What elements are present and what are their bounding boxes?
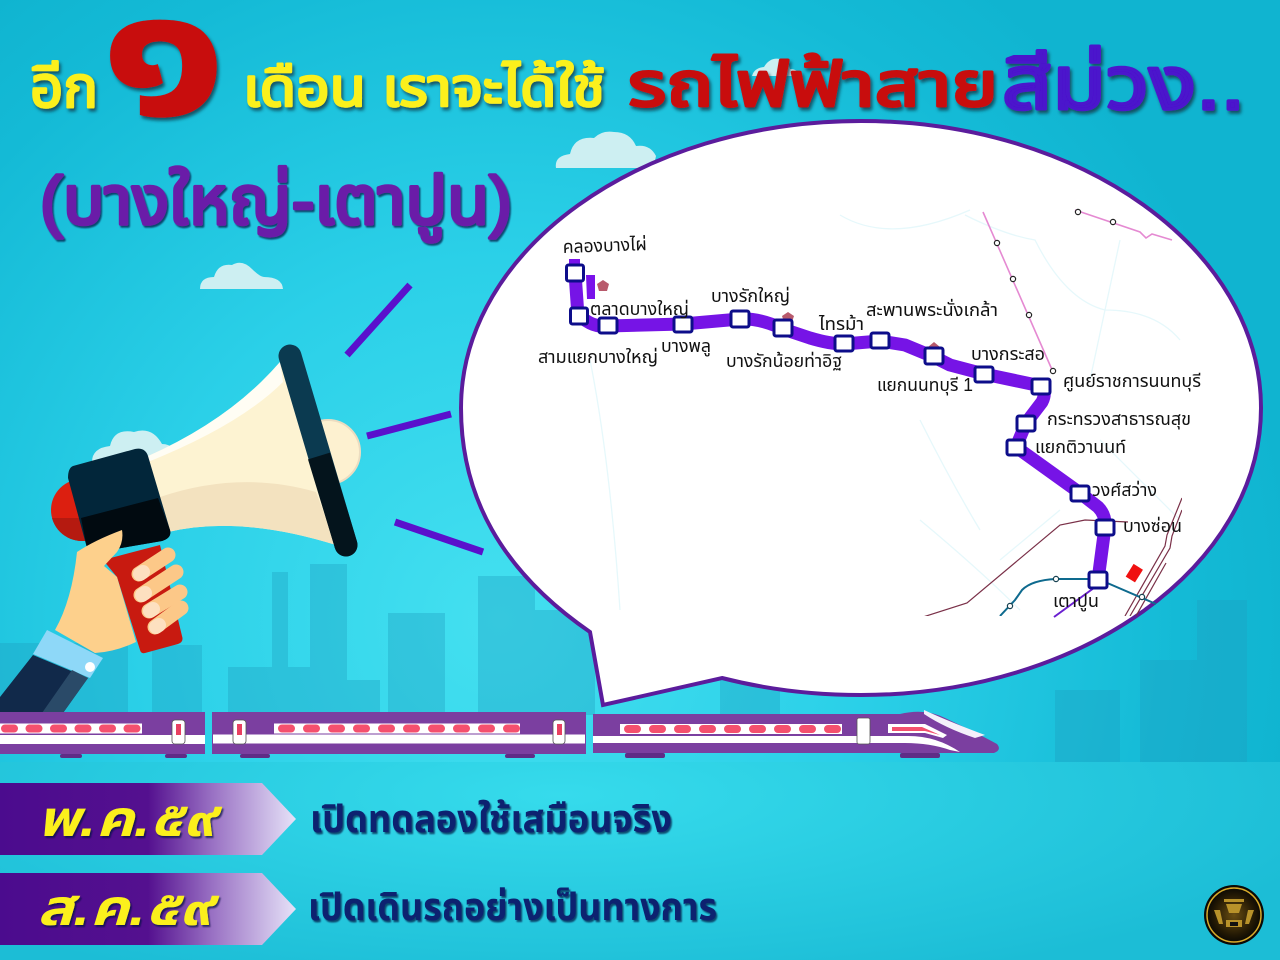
route map [538,209,1201,617]
depot marker [1126,564,1143,582]
train [0,710,999,758]
station labels: สามแยกบางใหญ่ [538,347,658,367]
thin purple extension [1054,585,1098,617]
station labels: แยกติวานนท์ [1035,437,1126,457]
subtitle: route name: (บางใหญ่-เตาปูน) [40,163,512,242]
station labels: คลองบางไผ่ [562,234,647,257]
ribbon date label: พ.ค.๕๙ [37,791,223,847]
station labels: แยกนนทบุรี 1 [877,375,973,396]
megaphone rim [290,356,346,545]
hand palm [55,530,136,653]
text: official opening: เปิดเดินรถอย่างเป็นทางการ [308,887,717,929]
shirt cuff [33,630,103,678]
title words: สีม่วง: สีม่วง.. [1002,42,1245,125]
blue line [1000,576,1156,616]
station labels: บางกระสอ [971,344,1045,364]
purple line route [575,273,1105,580]
station markers [566,265,1114,588]
hand fingers [139,555,181,627]
landmark markers [597,280,940,347]
ribbon: August 59 [0,873,296,945]
station labels: เตาปูน [1053,591,1099,613]
station labels: ศูนย์ราชการนนทบุรี [1063,371,1201,393]
station labels: บางรักใหญ่ [711,286,790,306]
station labels: บางรักน้อยท่าอิฐ [726,351,842,371]
suit sleeve [0,655,88,713]
station labels: บางซ่อน [1123,516,1182,536]
station labels: สะพานพระนั่งเกล้า [866,298,998,320]
title words: เดือน เราจะได้ใช้: เดือน เราจะได้ใช้ [243,58,605,118]
megaphone horn [146,362,336,545]
station labels: ไทรม้า [818,314,864,334]
car 3 with nose [593,710,999,758]
title line 1 [30,0,1245,159]
speech bubble [461,121,1261,705]
title word: อีก: อีก [30,55,98,120]
station labels: ตลาดบางใหญ่ [590,299,689,319]
station labels [538,234,1201,613]
megaphone body [68,449,170,553]
megaphone rear cap [51,479,113,541]
title words: รถไฟฟ้าสาย: รถไฟฟ้าสาย [628,51,998,120]
text: trial opening: เปิดทดลองใช้เสมือนจริง [310,799,672,841]
icon: megaphone held in hand [0,356,360,713]
depot spur [569,259,595,299]
icon: ministry emblem [1204,885,1264,945]
clouds [92,59,800,462]
megaphone dome [296,420,360,484]
sound rays [347,285,483,552]
faint road network [590,210,1180,610]
station labels: กระทรวงสาธารณสุข [1047,409,1191,430]
megaphone handle [103,545,182,653]
ribbon: May 59 [0,783,296,855]
city skyline [0,564,1247,762]
car 2 [212,712,586,758]
ribbon date label: ส.ค.๕๙ [37,880,220,936]
lower ground band [0,762,1280,960]
pink connecting line [983,209,1172,374]
station labels: วงศ์สว่าง [1092,480,1157,500]
station labels: บางพลู [661,336,711,358]
car 1 [0,712,205,758]
maroon line and rail tracks [923,498,1182,617]
